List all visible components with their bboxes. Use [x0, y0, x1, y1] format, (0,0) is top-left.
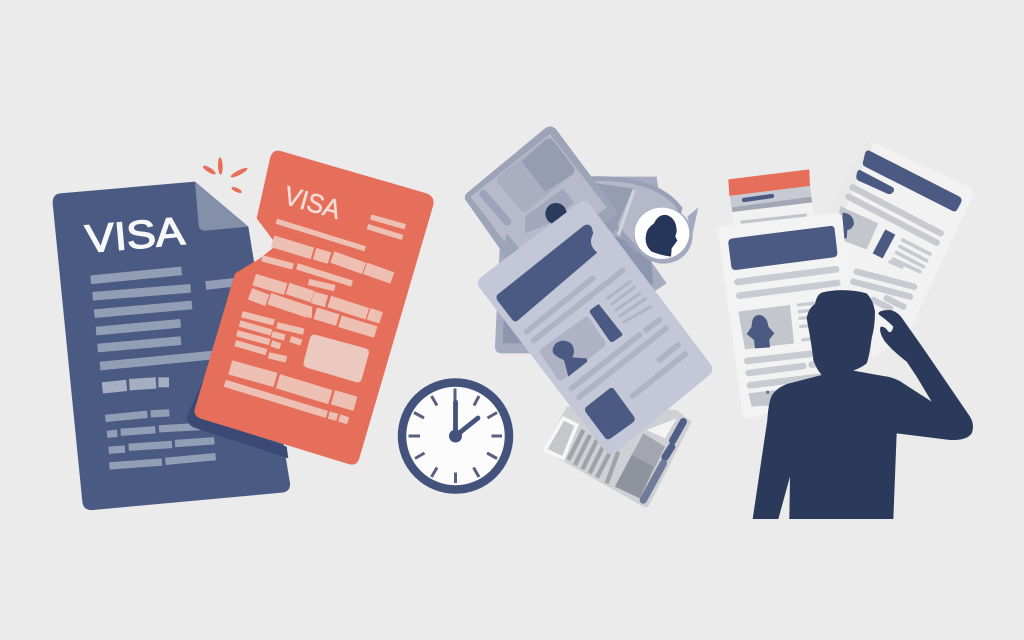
document with red header — [728, 169, 814, 227]
blue document text lines — [95, 271, 232, 466]
right document header — [863, 150, 962, 212]
panel: stack of gray documents — [465, 127, 712, 507]
person icon — [553, 341, 587, 377]
speech bubble with person — [634, 207, 698, 264]
right tilted document — [827, 139, 973, 357]
front document text lines — [527, 271, 685, 397]
blue VISA title: VISA — [84, 209, 187, 262]
clock hands — [456, 402, 478, 436]
front document — [478, 201, 712, 454]
red visa document with torn edge — [194, 151, 434, 465]
person silhouette scratching head — [753, 290, 973, 519]
shadow under red document — [187, 380, 288, 458]
back document — [465, 127, 616, 278]
small blue block — [590, 304, 622, 342]
red VISA title: VISA — [281, 180, 344, 225]
pale corner — [647, 418, 677, 438]
front upright document — [718, 213, 857, 418]
front document lines — [737, 269, 837, 385]
page fold — [195, 182, 248, 231]
gray block — [615, 433, 665, 498]
clock tick marks — [408, 388, 502, 483]
stripes — [568, 430, 618, 483]
panel: confused person with documents — [718, 139, 973, 519]
bottom blue block — [585, 388, 635, 439]
impact sparks — [202, 157, 248, 194]
front document header — [497, 225, 598, 321]
bottom faded document — [543, 407, 692, 507]
panel: blue and red visa documents — [53, 151, 434, 510]
white framed box — [545, 418, 577, 458]
red document text blocks — [228, 218, 403, 420]
blue sidebar — [673, 422, 683, 441]
right document text lines — [848, 187, 941, 308]
person head on back document — [545, 203, 567, 224]
icon: clock — [402, 382, 509, 490]
front document photo — [540, 317, 606, 380]
front document header — [728, 226, 837, 270]
front document photo — [738, 305, 794, 349]
blue visa document — [53, 182, 290, 510]
back shield shape — [495, 177, 680, 353]
